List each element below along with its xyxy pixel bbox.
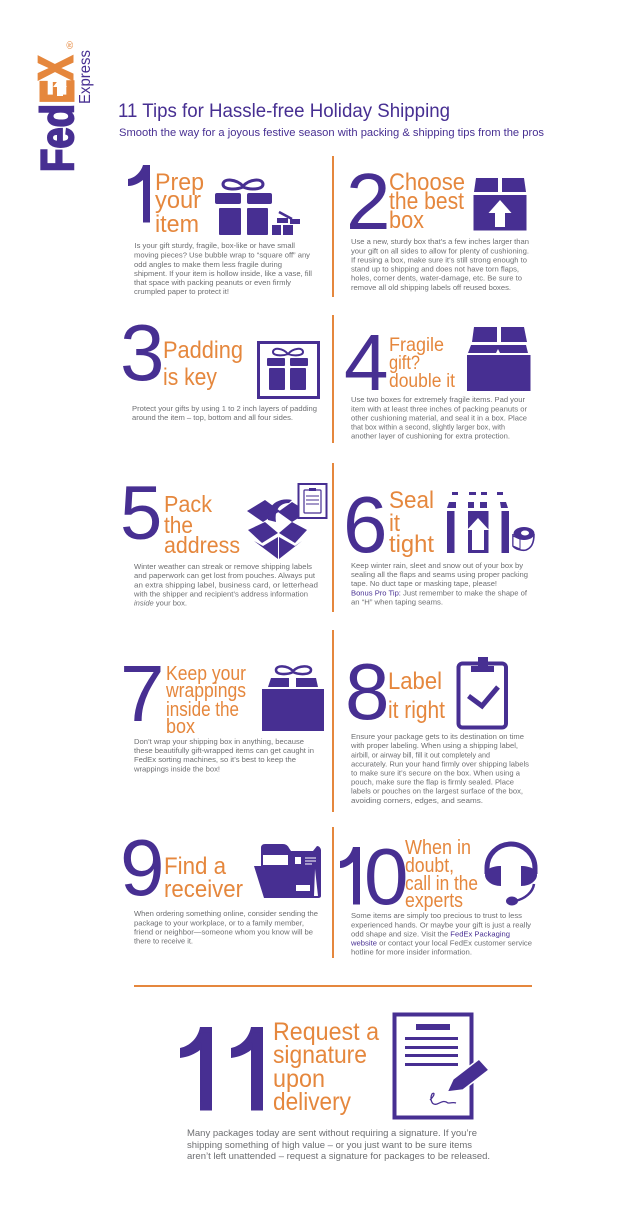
panel: tip 11 [173,1009,490,1161]
text: tip 8 body: Ensure your package gets to its destination on time [351,732,524,741]
heading: Keep your wrappings inside the box: Keep your [166,663,246,685]
text: tip 6 body: Bonus Pro Tip: Just remember to make the shape of [351,588,527,598]
text: tip 5 body: and paperwork can get lost from pouches. Always put [134,571,315,580]
text: tip 8 body: to make sure it’s secure on the box. When using a [351,768,520,778]
icon: gifts [215,180,300,235]
text: tip 11 body: aren’t left unattended – request a signature for packages to be released. [187,1151,490,1161]
heading: When in doubt, call in the experts: doubt, [405,855,454,877]
divider horizontal [134,985,532,987]
subtitle: Smooth the way for a joyous festive season with packing & shipping tips from the pros [119,127,545,139]
number 1 [128,165,150,222]
number 11: 1 [224,1009,286,1134]
divider row 2 [332,315,334,443]
panel: tip 4 [344,318,530,440]
text: tip 8 body: labels or pouches on the largest surface of the box, [351,786,523,796]
number 10 [340,847,406,905]
heading: Label it right: it right [388,697,445,724]
number 8: 8 [345,647,390,736]
text: tip 10 body: odd shape and size. Visit the FedEx Packaging [351,930,510,938]
heading: Request a signature upon delivery: upon [273,1065,325,1093]
text: tip 5 body: Winter weather can streak or remove shipping labels [134,562,312,571]
heading: Fragile gift? double it: gift? [389,352,420,374]
heading: Choose the best box [389,169,465,234]
text: tip 5 body: inside your box. [134,598,187,608]
title: 11 Tips for Hassle-free Holiday Shipping [118,101,450,122]
text: tip 5 body: with the shipper and recipient’s address information [133,590,308,598]
heading: Request a signature upon delivery: delivery [273,1088,351,1116]
number 10: 0 [364,832,408,921]
logo: FedEx Express: Fed [31,104,83,172]
text: tip 3 body [132,404,317,422]
text: tip 1 body: shipment. If your item is hollow inside, like a vase, fill [134,269,312,278]
heading: Request a signature upon delivery: Request a [273,1018,379,1046]
icon: document and pen [394,1014,489,1118]
text: tip 7 body: wrappings inside the box! [133,764,220,774]
text: tip 7 body: these beautifully gift-wrapped items can get caught in [134,746,314,755]
logo: FedEx Express: x [13,55,87,81]
heading: Keep your wrappings inside the box: wrappings [165,680,246,702]
text: tip 1 body: Is your gift sturdy, fragile, box-like or have small [134,241,295,250]
divider row 3 [332,463,334,612]
text: tip 1 body: crumpled paper to protect it! [134,287,229,296]
heading: Prep your item [155,169,204,238]
heading: When in doubt, call in the experts [405,837,478,912]
text: tip 4 body [351,395,528,440]
logo: FedEx Express: ® [65,41,75,49]
text: tip 4 body: Use two boxes for extremely fragile items. Pad your [351,395,526,404]
panel: tip 9 [120,823,321,946]
heading: Padding is key [163,337,243,391]
heading: Find a receiver [164,853,243,903]
icon: open box with clipboard [247,484,326,559]
panel: tip 8 [345,647,529,805]
divider row 5 [332,827,334,958]
text: tip 6 body [351,561,528,606]
panel: tip 3 [120,308,318,422]
text: tip 4 body: item with at least three inches of packing peanuts or [351,404,528,414]
text: tip 2 body: your gift on all sides to allow for plenty of cushioning. [351,246,529,255]
text: tip 1 body: moving pieces? Use bubble wrap to “square off” any [134,250,310,260]
text: tip 5 body [133,562,318,608]
logo: FedEx Express: E [31,80,83,103]
text: tip 10 body: Some items are simply too precious to trust to less [351,911,522,920]
text: tip 2 body: stand up to shipping and does not have torn flaps, [351,265,519,274]
heading: Seal it tight [389,487,434,558]
panel: tip 6 [343,480,534,606]
number 6: 6 [343,480,388,569]
heading: Pack the address: the [164,512,193,538]
text: tip 8 body: airbill, or airway bill, fill it out completely and [351,750,490,760]
text: tip 8 body: pouch, make sure the flap is firmly sealed. Place [351,778,514,786]
heading: Find a receiver: receiver [164,876,243,903]
text: tip 3 body: around the item – top, bottom and all four sides. [132,413,293,422]
icon: framed gift [258,342,318,398]
panel: tip 7 [120,649,324,774]
text: tip 2 body [351,237,529,292]
text: tip 8 body: avoiding corners, edges, and seams. [351,796,483,805]
text: tip 11 body: Many packages today are sent without requiring a signature. If you’re [187,1128,477,1138]
heading: Prep your item: Prep [155,169,204,196]
text: tip 3 body: Protect your gifts by using 1 to 2 inch layers of padding [132,404,317,413]
heading: Fragile gift? double it: Fragile [389,334,444,356]
panel: tip 2 [346,157,529,292]
text: tip 7 body: FedEx sorting machines, so it’s best to keep the [134,755,296,764]
text: tip 4 body: another layer of cushioning for extra protection. [351,432,510,440]
heading: Label it right: Label [388,668,442,695]
icon: double box [467,327,530,391]
number 4: 4 [344,318,388,407]
number 9: 9 [120,823,164,912]
heading: Label it right [388,668,445,724]
text: tip 6 body: an “H” when taping seams. [351,598,443,606]
number 2: 2 [346,157,390,246]
text: tip 2 body: Use a new, sturdy box that’s a few inches larger than [351,237,529,246]
heading: Fragile gift? double it: double it [389,370,456,392]
heading: Keep your wrappings inside the box: box [166,716,195,738]
text: tip 5 body: an extra shipping label, business card, or letterhead [134,580,318,590]
icon: taped box and tape roll [447,492,534,553]
heading: Find a receiver: Find a [164,853,227,880]
text: tip 1 body: that space with packing peanuts or even firmly [134,278,291,287]
text: tip 4 body: that box within a second, slightly larger box, with [351,422,505,432]
text: tip 10 body: experienced hands. Or maybe your gift is just a really [351,920,531,930]
text: tip 8 body: accurately. Run your hand firmly over shipping labels [351,760,529,768]
heading: Prep your item: item [155,211,199,238]
heading: Keep your wrappings inside the box: inside the [166,699,239,721]
text: tip 11 body: shipping something of high value – or you just want to be sure items [187,1140,472,1150]
heading: Seal it tight: tight [389,531,434,558]
divider row 4 [332,630,334,812]
icon: clipboard with check [458,657,506,728]
logo: FedEx Express [13,41,94,172]
heading: Request a signature upon delivery [273,1018,379,1116]
heading: When in doubt, call in the experts: experts [405,890,463,912]
text: tip 9 body: When ordering something online, consider sending the [134,909,318,918]
text: tip 6 body: sealing all the flaps and seams using proper packing [351,570,528,579]
heading: Fragile gift? double it [389,334,456,392]
text: tip 10 body: hotline for more insider information. [351,948,472,956]
text: tip 8 body: with proper labeling. When using a shipping label, [350,741,518,750]
heading: Pack the address [164,491,240,558]
heading: Pack the address: address [164,532,240,558]
number 11: 1 [173,1009,235,1134]
heading: Request a signature upon delivery: signature [273,1041,367,1069]
panel: tip 5 [120,471,326,608]
text: tip 8 body [350,732,529,805]
number 5: 5 [120,471,162,556]
heading: Keep your wrappings inside the box [165,663,246,738]
heading: Seal it tight: it [389,510,400,537]
panel: tip 1 [128,165,312,296]
text: tip 11 body [187,1128,490,1161]
text: tip 6 body: tape. No duct tape or masking tape, please! [351,579,497,588]
number 7: 7 [120,649,164,738]
heading: Prep your item: your [155,187,201,214]
icon: headset [485,844,537,906]
heading: Padding is key: Padding [163,337,243,364]
text: tip 4 body: other cushioning material, and seal it in a box. Place [351,414,527,422]
text: tip 10 body: website or contact your local FedEx customer service [350,938,532,948]
text: tip 1 body: odd angles to make them less fragile during [134,260,282,269]
heading: When in doubt, call in the experts: call in the [405,873,478,895]
logo: FedEx Express: Express [77,50,94,104]
text: tip 6 body: Keep winter rain, sleet and snow out of your box by [351,561,523,570]
text: tip 9 body: package to your workplace, or to a family member, [134,918,304,928]
heading: Padding is key: is key [163,364,217,391]
heading: Choose the best box: Choose [389,169,465,196]
heading: Choose the best box: box [389,207,424,234]
number 3: 3 [120,308,164,397]
number 11 [180,1027,263,1110]
text: tip 2 body: If reusing a box, make sure it’s still strong enough to [351,255,527,264]
text: tip 9 body: friend or neighbor—someone whom you know will be [134,928,313,936]
divider row 1 [332,156,334,297]
number 10: 1 [333,832,377,921]
icon: box with arrow [474,178,526,230]
heading: Choose the best box: the best [389,188,464,215]
text: tip 1 body [134,241,312,296]
icon: gift inside box [262,666,324,731]
panel: tip 10 [340,839,538,954]
text: tip 10 body [350,911,532,956]
text: tip 7 body [133,737,314,774]
text: tip 2 body: holes, corner dents, water-damage, etc. Be sure to [351,274,522,283]
number 1: 1 [123,150,167,239]
text: tip 9 body: there to receive it. [134,936,193,946]
heading: Seal it tight: Seal [389,487,434,514]
text: tip 2 body: remove all old shipping labels off reused boxes. [351,283,511,292]
icon: folder [254,844,321,898]
heading: Pack the address: Pack [164,491,212,517]
heading: When in doubt, call in the experts: When in [405,837,471,859]
text: tip 9 body [134,909,318,946]
text: tip 7 body: Don’t wrap your shipping box in anything, because [134,737,304,746]
